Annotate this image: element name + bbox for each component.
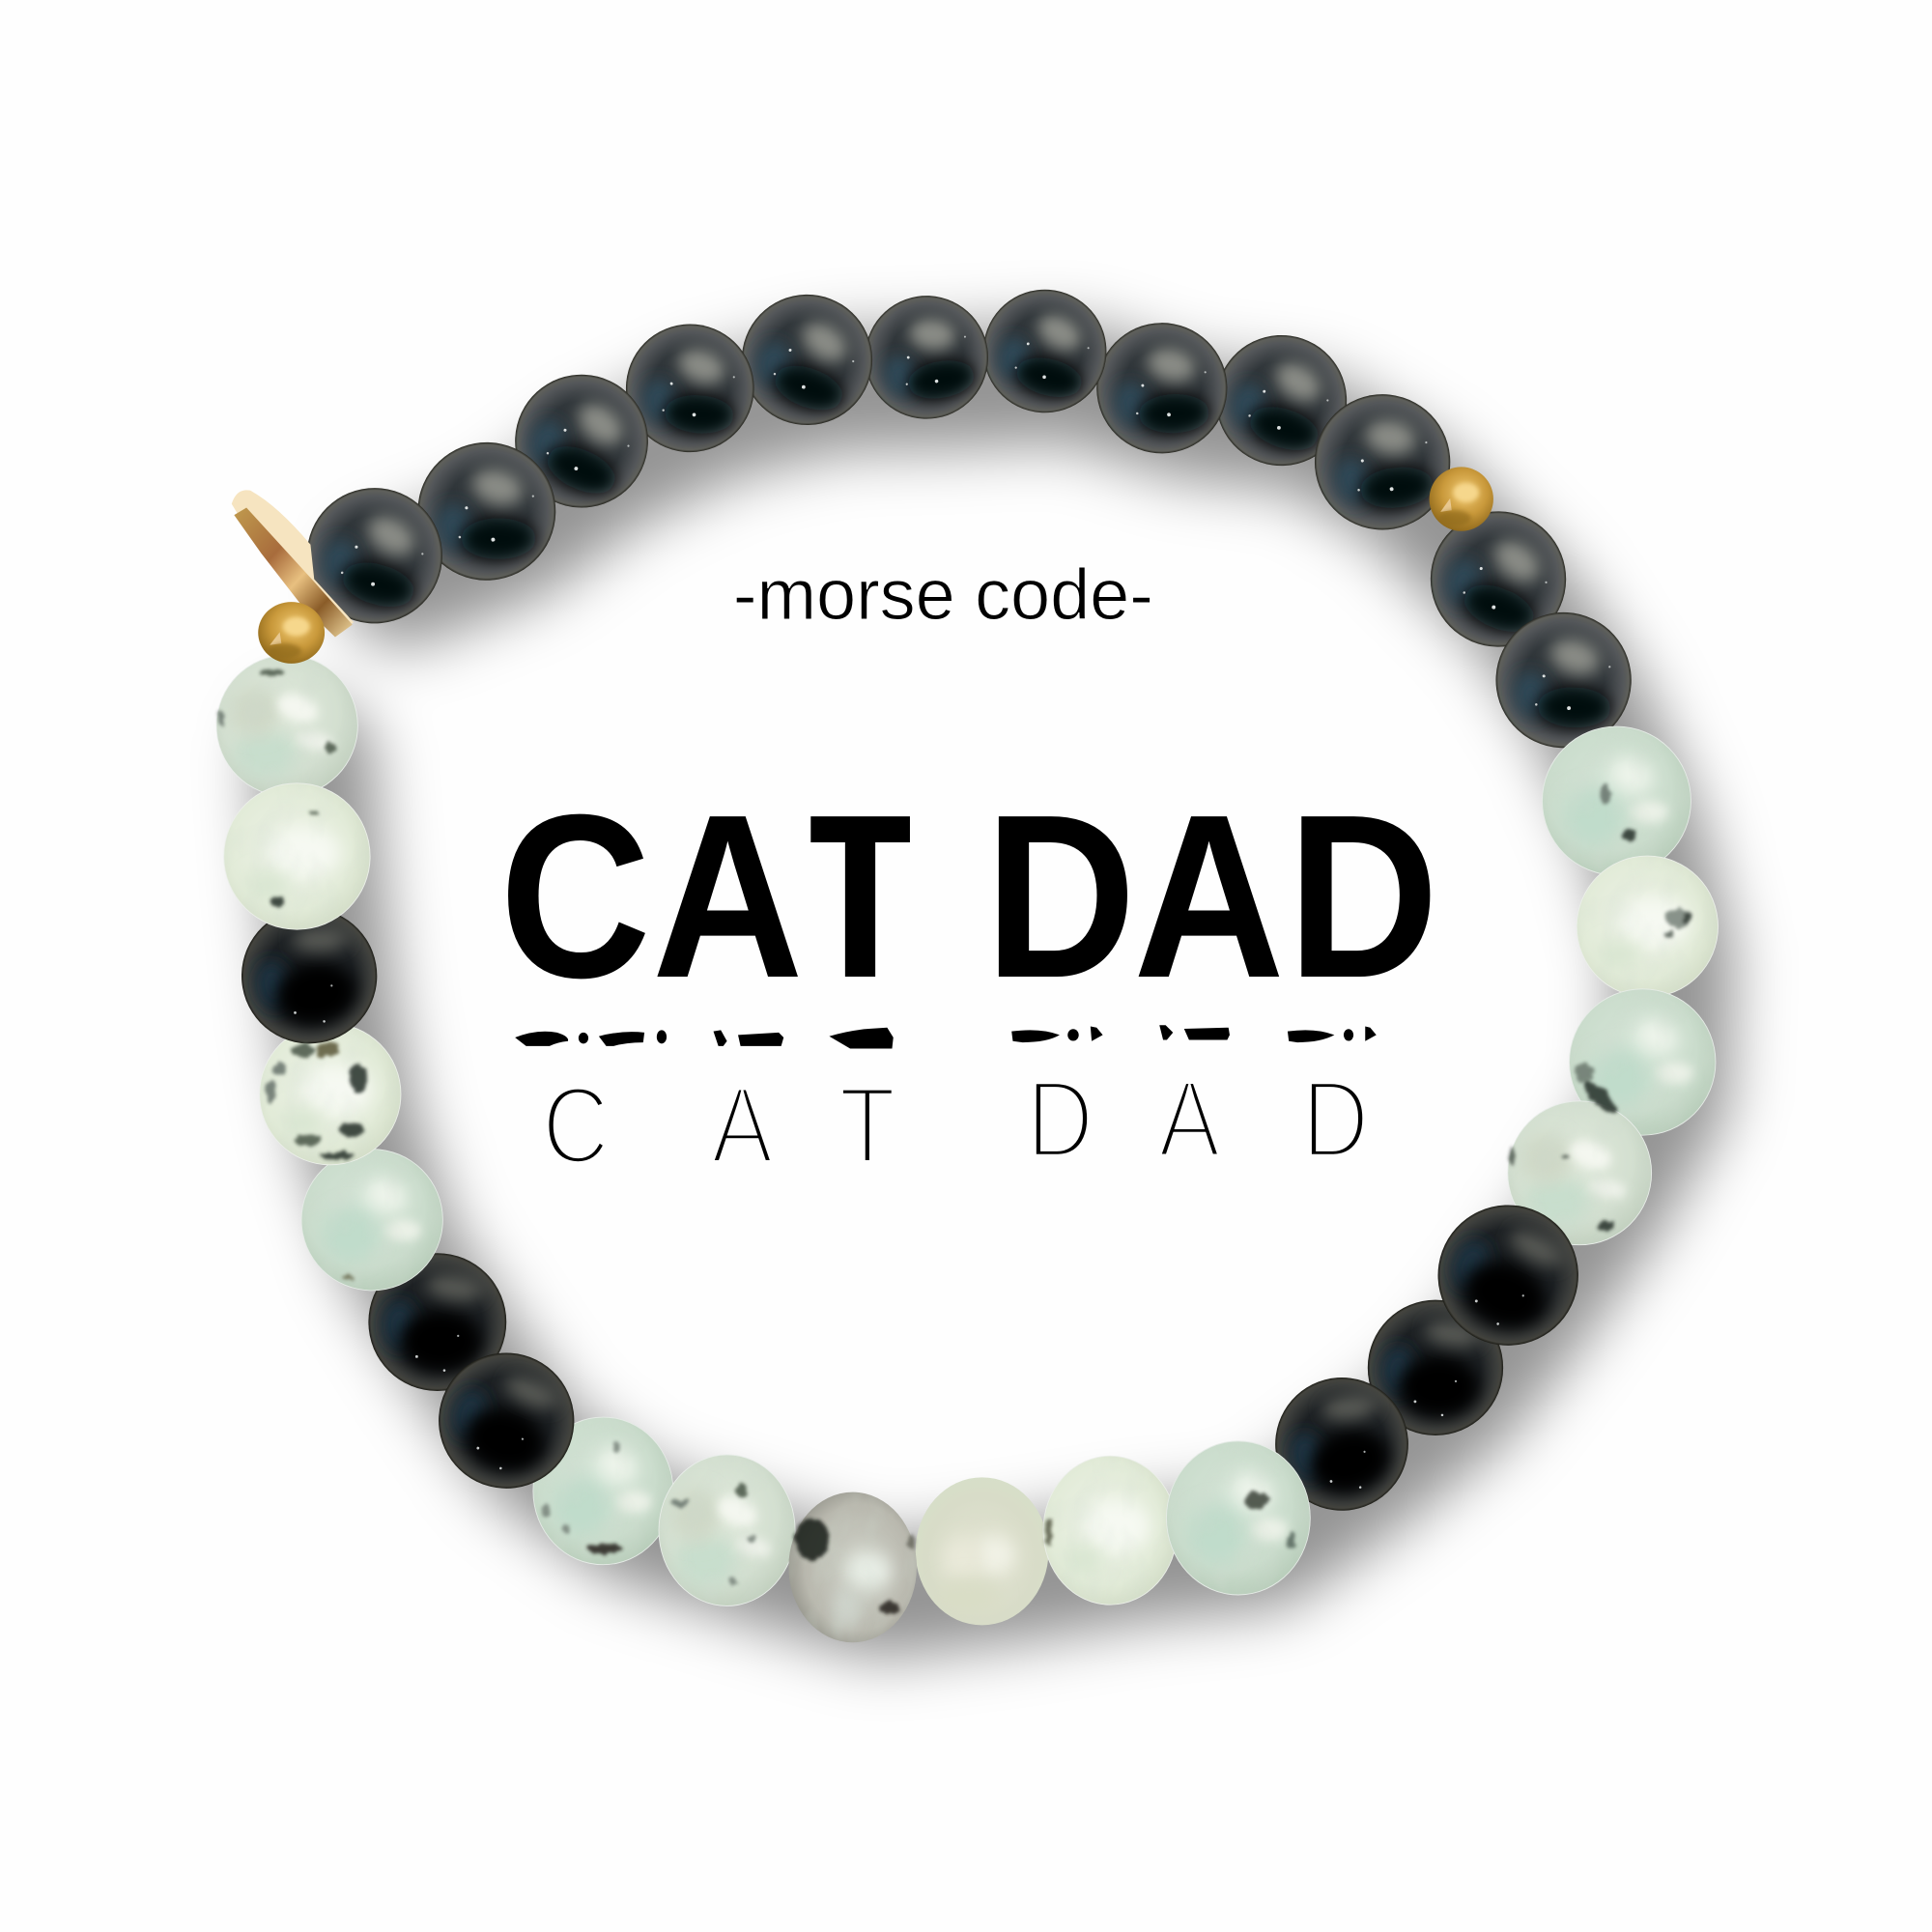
morse letter C bbox=[515, 1030, 667, 1046]
morse code marks bbox=[515, 1025, 1377, 1048]
morse letter D bbox=[1288, 1026, 1377, 1042]
title: CAT DAD: CAT DAD bbox=[499, 765, 1438, 1026]
morse letter A bbox=[714, 1030, 783, 1046]
dark inclusions on the jade beads bbox=[219, 669, 1691, 1614]
black beads: top arc bbox=[300, 278, 1466, 630]
jade beads: bottom arc bbox=[532, 1417, 1311, 1642]
black beads: lower left bbox=[368, 1253, 589, 1504]
gold spacer bead: right bbox=[1430, 467, 1493, 531]
black beads: right shoulder bbox=[1418, 498, 1640, 756]
bracelet bbox=[216, 278, 1719, 1642]
morse letter A bbox=[1159, 1025, 1230, 1040]
morse letter T bbox=[829, 1028, 894, 1048]
jade beads: right side bbox=[1507, 726, 1719, 1245]
black beads: lower right bbox=[1261, 1185, 1598, 1525]
subtitle: morse code: -morse code- bbox=[733, 554, 1153, 635]
caption: thin spaced CAT DAD: CAT DAD bbox=[542, 1059, 1369, 1187]
morse letter D bbox=[1011, 1026, 1103, 1042]
gold charm disc bbox=[232, 490, 354, 637]
title T crossbar trim bbox=[793, 807, 927, 844]
gold spacer bead: left bbox=[258, 602, 325, 664]
bracelet drop shadow bbox=[314, 384, 1674, 1600]
jade beads: left side bbox=[216, 655, 443, 1291]
